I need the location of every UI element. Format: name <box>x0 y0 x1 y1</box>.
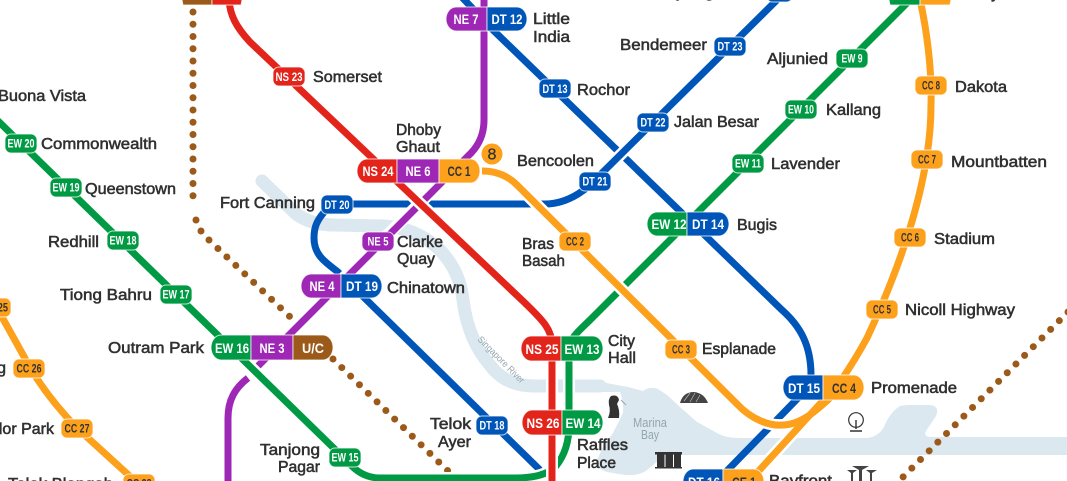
label Raffles Place <box>577 437 628 472</box>
chip EW 9: EW 9 <box>842 54 862 66</box>
label Little India <box>533 11 570 46</box>
chip EW 19: EW 19 <box>52 182 80 194</box>
chip: top left partial interchange <box>182 0 242 5</box>
chip CC 3: CC 3 <box>672 344 690 356</box>
blue line: Little India to Promenade and Bayfront <box>457 0 811 478</box>
orange line: Circle line <box>482 0 931 475</box>
label Jalan Besar: Jalan Besar <box>674 114 760 131</box>
label Aljunied: Aljunied <box>767 51 828 68</box>
label Rochor: Rochor <box>577 82 631 99</box>
chip DT 22 <box>637 113 669 132</box>
chip DT 21 <box>579 172 611 191</box>
chip EW 10: EW 10 <box>788 104 814 116</box>
label Bras Basah: Basah <box>522 253 565 270</box>
label Dakota: Dakota <box>955 79 1007 96</box>
chip NE 5 <box>362 232 394 251</box>
label Fort Canning: Fort Canning <box>220 195 315 212</box>
label Esplanade: Esplanade <box>702 341 776 358</box>
chip: Raffles Place: NS 26 <box>526 415 560 431</box>
chip CC 8 <box>915 76 947 95</box>
label Telok Ayer: Telok <box>430 416 472 433</box>
chip DT 22: DT 22 <box>640 118 666 130</box>
chip: Outram Park: U/C <box>302 340 324 356</box>
chip: Chinatown <box>301 274 382 298</box>
chip CC 8: CC 8 <box>922 80 940 92</box>
chip EW 17: EW 17 <box>162 290 190 302</box>
label Nicoll Highway: Nicoll Highway <box>905 302 1015 319</box>
chip: Little India <box>446 7 527 31</box>
label Redhill: Redhill <box>48 234 99 251</box>
label Bras Basah <box>522 236 565 270</box>
chip DT 18: DT 18 <box>480 420 505 432</box>
chip: Dhoby Ghaut: NS 24 <box>362 163 394 179</box>
river label: Singapore River <box>475 334 526 386</box>
bay label: Bay <box>641 427 659 442</box>
station number 8 badge <box>482 144 502 164</box>
chip: Outram Park <box>211 335 333 360</box>
red line: North South line <box>229 0 552 481</box>
bay label <box>633 415 668 442</box>
chip EW 15: EW 15 <box>332 452 359 464</box>
chip EW 9 <box>836 49 868 68</box>
chip DT 13 <box>539 79 571 98</box>
label Kallang: Kallang <box>826 102 881 119</box>
label Bendemeer: Bendemeer <box>620 37 708 54</box>
brown dotted line: east <box>903 312 1067 477</box>
chip CC 6 <box>894 228 926 247</box>
chip: Bugis <box>647 212 729 236</box>
chip: Outram Park: EW 16 <box>215 340 249 356</box>
label Queenstown: Queenstown <box>85 181 176 198</box>
landmark: Esplanade <box>680 392 708 403</box>
label Dhoby Ghaut: Ghaut <box>396 139 441 156</box>
chip CC 26: CC 26 <box>16 364 42 376</box>
chip: City Hall <box>521 336 603 361</box>
label Buona Vista: Buona Vista <box>0 88 86 105</box>
chip CC 2 <box>559 232 591 251</box>
label Clarke Quay: Clarke <box>397 234 443 251</box>
label Telok Ayer: Ayer <box>438 434 472 451</box>
label Bras Basah: Bras <box>522 236 554 253</box>
chip: Raffles Place <box>522 410 603 435</box>
label Raffles Place: Place <box>577 455 616 472</box>
label Tiong Bahru: Tiong Bahru <box>60 287 152 304</box>
label City Hall: Hall <box>608 350 636 367</box>
landmark: Gardens by the Bay <box>847 466 877 481</box>
chip EW 11: EW 11 <box>735 158 761 170</box>
chip NE 5: NE 5 <box>368 236 389 248</box>
chip DT 20 <box>321 195 353 214</box>
label Raffles Place: Raffles <box>577 437 628 454</box>
chip EW 17 <box>160 285 192 304</box>
chip: City Hall: NS 25 <box>526 341 559 357</box>
brown dotted line: U/C to Telok Ayer <box>333 359 448 471</box>
landmark: Merlion <box>608 396 626 418</box>
chip EW 15 <box>329 448 361 467</box>
label Tanjong Pagar <box>260 442 321 476</box>
chip: Dhoby Ghaut: NE 6 <box>406 163 431 179</box>
label Promenade: Promenade <box>871 380 957 397</box>
label City Hall: City <box>608 333 635 350</box>
label Mountbatten: Mountbatten <box>951 154 1047 171</box>
chip CC 7 <box>911 150 943 169</box>
chip: Promenade <box>783 375 864 400</box>
brown dotted line: upper left section <box>193 12 306 332</box>
label Little India: Little <box>533 11 570 28</box>
chip: Chinatown: DT 19 <box>346 278 378 294</box>
chip CC 3 <box>665 340 697 359</box>
label Tanjong Pagar: Tanjong <box>260 442 320 459</box>
label Somerset: Somerset <box>313 69 383 86</box>
landmark: Singapore Flyer <box>849 413 863 431</box>
bay label: Marina <box>633 415 668 430</box>
label Stadium: Stadium <box>934 231 995 248</box>
purple line: North East line <box>228 0 484 481</box>
chip: Promenade: CC 4 <box>832 380 856 396</box>
chip: Bugis: EW 12 <box>652 216 687 232</box>
chip DT 18 <box>476 416 508 435</box>
chip EW 19 <box>50 178 82 197</box>
orange line: far left <box>0 308 145 481</box>
chip CC 28 <box>123 474 155 481</box>
blue line: Bendemeer to Fort Canning and Telok Ayer <box>314 0 780 470</box>
label Bugis: Bugis <box>737 217 777 234</box>
chip EW 18: EW 18 <box>110 236 137 248</box>
chip: Outram Park: NE 3 <box>260 340 285 356</box>
chip: Little India: DT 12 <box>492 11 523 27</box>
label City Hall <box>608 333 636 367</box>
label Outram Park: Outram Park <box>108 340 205 357</box>
chip EW 11 <box>732 154 764 173</box>
label Bencoolen: Bencoolen <box>517 153 594 170</box>
chip: Little India: NE 7 <box>454 11 479 27</box>
chip: Dhoby Ghaut <box>357 159 480 183</box>
chip CC 26 <box>13 359 45 378</box>
label Tanjong Pagar: Pagar <box>278 459 321 476</box>
chip CC 27 <box>61 419 93 438</box>
chip EW 20 <box>5 134 37 153</box>
chip CC 7: CC 7 <box>918 154 936 166</box>
station number 8 badge: 8 <box>488 146 497 164</box>
chip DT 13: DT 13 <box>542 84 568 96</box>
chip: Bayfront <box>683 469 764 481</box>
label Little India: India <box>533 29 570 46</box>
label Dhoby Ghaut: Dhoby <box>396 122 441 139</box>
chip CC 6: CC 6 <box>901 232 919 244</box>
label Telok Ayer <box>430 416 472 451</box>
label Dhoby Ghaut <box>396 122 441 156</box>
chip: Bugis: DT 14 <box>692 216 724 232</box>
chip EW 20: EW 20 <box>8 138 34 150</box>
chip: Chinatown: NE 4 <box>310 278 335 294</box>
label Clarke Quay: Quay <box>397 251 435 268</box>
interchange chips <box>182 0 951 481</box>
chip NS 23 <box>273 67 305 86</box>
chip CC 5 <box>866 300 898 319</box>
chip CC 2: CC 2 <box>566 236 584 248</box>
landmark: Marina Bay Sands <box>655 452 682 468</box>
chip: Promenade: DT 15 <box>788 380 820 396</box>
label Clarke Quay <box>397 234 443 268</box>
chip: Raffles Place: EW 14 <box>566 415 601 431</box>
chip EW 18 <box>107 231 139 250</box>
chip: Paya Lebar partial <box>889 0 951 5</box>
water: Singapore River and Marina Bay <box>262 181 1067 475</box>
chip DT 23 <box>714 37 746 56</box>
chip DT 20: DT 20 <box>324 200 350 212</box>
chip CC 5: CC 5 <box>873 304 891 316</box>
chip EW 10 <box>785 100 817 119</box>
chip: DT 24 partial <box>767 0 792 2</box>
chip NS 23: NS 23 <box>276 72 302 84</box>
chip: Dhoby Ghaut: CC 1 <box>448 163 471 179</box>
chip CC 25 <box>0 298 11 317</box>
chip DT 23: DT 23 <box>718 42 742 54</box>
label Commonwealth: Commonwealth <box>41 136 157 153</box>
chip CC 27: CC 27 <box>64 424 90 436</box>
chip: City Hall: EW 13 <box>564 341 600 357</box>
label Chinatown: Chinatown <box>387 280 465 297</box>
chip DT 21: DT 21 <box>582 176 608 188</box>
label Lavender: Lavender <box>771 156 841 173</box>
